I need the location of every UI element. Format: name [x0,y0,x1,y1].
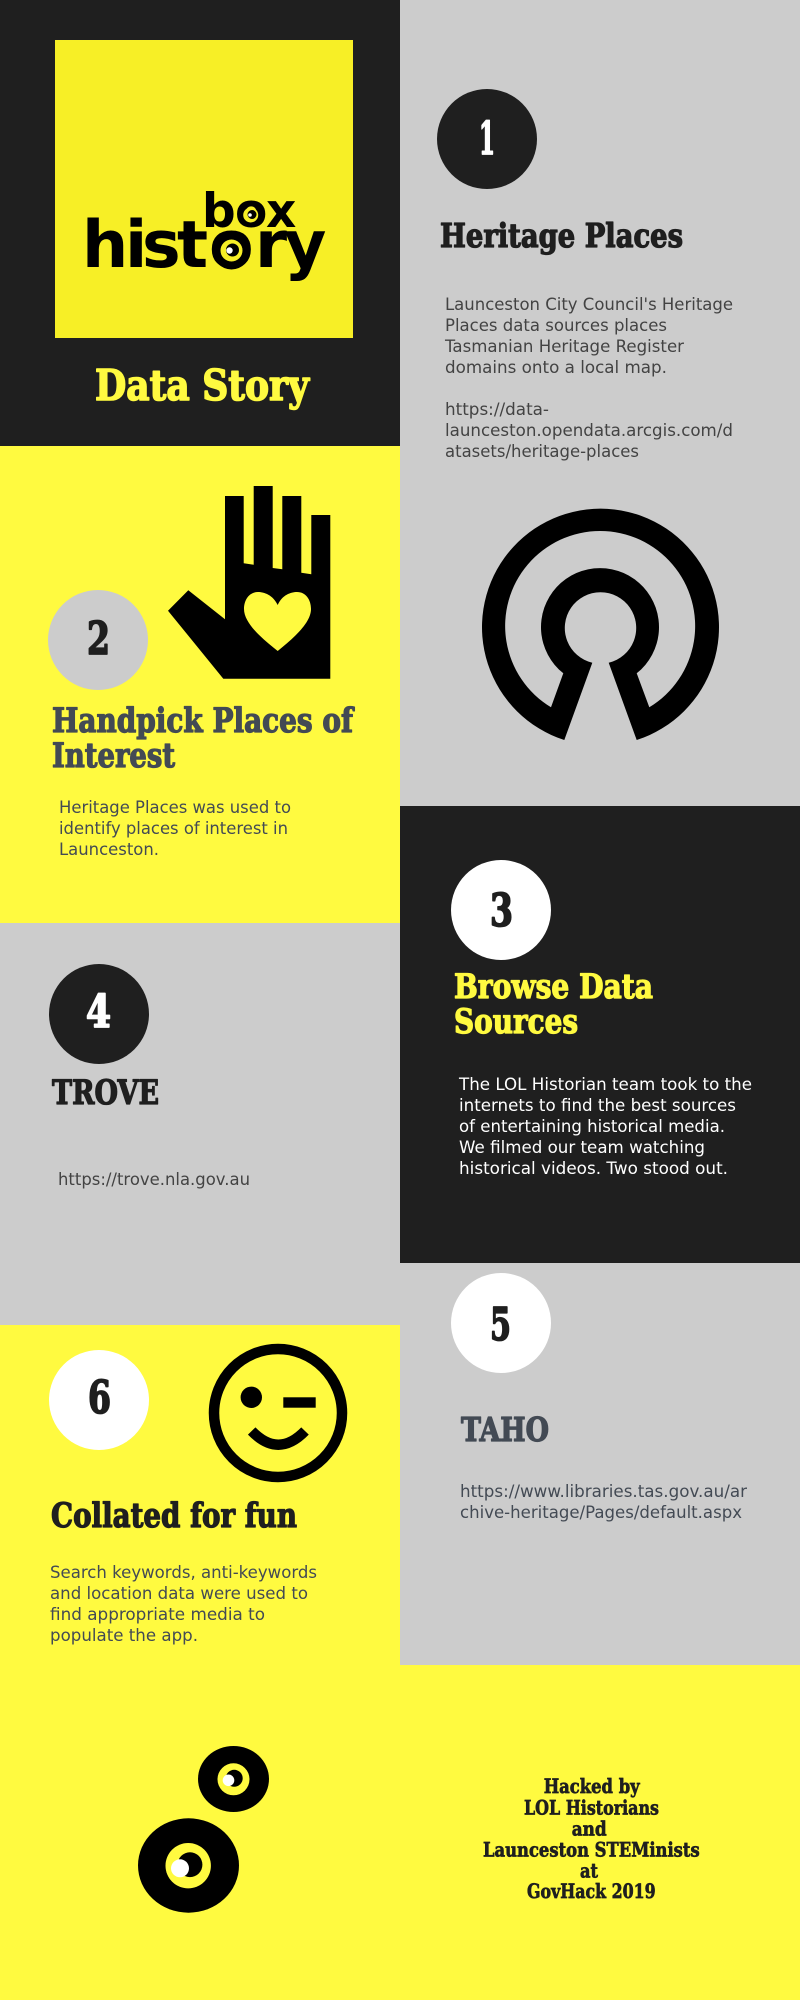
text: Handpick description: Launceston. [59,840,159,860]
number badge 4: 4 [86,985,111,1038]
heading: Handpick Places of Interest: Interest [52,736,175,776]
text: Handpick description: identify places of interest in [59,819,288,839]
icon: hand with heart [168,486,330,679]
number badge 6: 6 [88,1371,111,1424]
heading: TROVE: TROVE [52,1073,159,1113]
text: TROVE link: https://trove.nla.gov.au [58,1170,250,1190]
text: hacked by credits: at [580,1858,599,1882]
number badge 3: 3 [490,884,513,937]
text: hacked by credits: Launceston STEMinists [483,1838,700,1862]
text: hacked by credits: and [572,1816,607,1840]
text: TAHO link: chive-heritage/Pages/default.aspx [460,1503,742,1523]
text: Collated description: find appropriate media to [50,1605,265,1625]
text: Collated description [50,1563,317,1646]
text: Handpick description: Heritage Places was used to [59,798,291,818]
number badge 1: 1 [479,112,495,165]
text: Browse description: We filmed our team watching [459,1138,705,1158]
panel: step 2 Handpick Places of Interest [0,446,400,923]
text: hacked by credits: Hacked by [544,1774,641,1798]
text: TAHO link: https://www.libraries.tas.gov.au/ar [460,1482,747,1502]
text: hacked by credits [483,1774,700,1903]
text: TAHO link [460,1482,747,1523]
icon: open source keyhole ring [482,509,719,740]
number badge 5 [451,1273,551,1373]
number badge 6 [49,1350,149,1450]
icon: winking face [214,1349,342,1477]
number badge 3 [451,860,551,960]
text: Browse description: internets to find the best sources [459,1096,736,1116]
panel: step 1 Heritage Places [400,0,800,806]
icon: small eye [198,1746,269,1812]
panel: step 4 TROVE [0,923,400,1325]
heading: Browse Data Sources [454,967,653,1042]
text: Browse description [458,1075,752,1179]
text: Heritage Places description [444,295,733,462]
text: Heritage Places description: domains onto a local map. [445,358,667,378]
text: Heritage Places description: https://data- [445,400,549,420]
text: hacked by credits: GovHack 2019 [527,1879,656,1903]
text: Heritage Places description: Places data sources places [445,316,667,336]
logo: history box: history [82,208,326,283]
number badge 4 [49,964,149,1064]
text: Browse description: historical videos. Two stood out. [459,1159,728,1179]
heading: Collated for fun: Collated for fun [51,1496,297,1536]
text: Heritage Places description: Tasmanian Heritage Register [444,337,684,357]
text: Browse description: The LOL Historian team took to the [458,1075,752,1095]
heading: Browse Data Sources: Browse Data [454,967,653,1007]
text: Collated description: and location data were used to [50,1584,308,1604]
text: Collated description: Search keywords, anti-keywords [50,1563,317,1583]
heading: Handpick Places of Interest [52,701,355,776]
logo: history box: box [202,184,296,239]
icon: large eye [138,1818,239,1913]
text: Heritage Places description: Launceston City Council's Heritage [445,295,733,315]
text: Collated description: populate the app. [50,1626,198,1646]
panel: credits [400,1665,800,2000]
panel: title [0,0,400,446]
heading: Handpick Places of Interest: Handpick Places of [52,701,355,741]
heading: Browse Data Sources: Sources [454,1002,578,1042]
text: Browse description: of entertaining historical media. [459,1117,725,1137]
text: Heritage Places description: atasets/heritage-places [445,442,639,462]
text: Handpick description [59,798,291,860]
panel: step 3 Browse Data Sources [400,806,800,1263]
heading: TAHO: TAHO [461,1410,549,1449]
title: Data Story: Data Story [95,361,310,410]
heading: Heritage Places: Heritage Places [440,216,683,255]
panel: step 5 TAHO [400,1263,800,1665]
number badge 5: 5 [490,1298,511,1351]
number badge 2: 2 [87,612,110,665]
number badge 1 [437,89,537,189]
logo: history box [55,40,353,338]
text: Heritage Places description: launceston.opendata.arcgis.com/d [445,421,733,441]
panel: step 6 Collated for fun [0,1325,400,2000]
text: hacked by credits: LOL Historians [524,1796,659,1820]
number badge 2 [48,590,148,690]
